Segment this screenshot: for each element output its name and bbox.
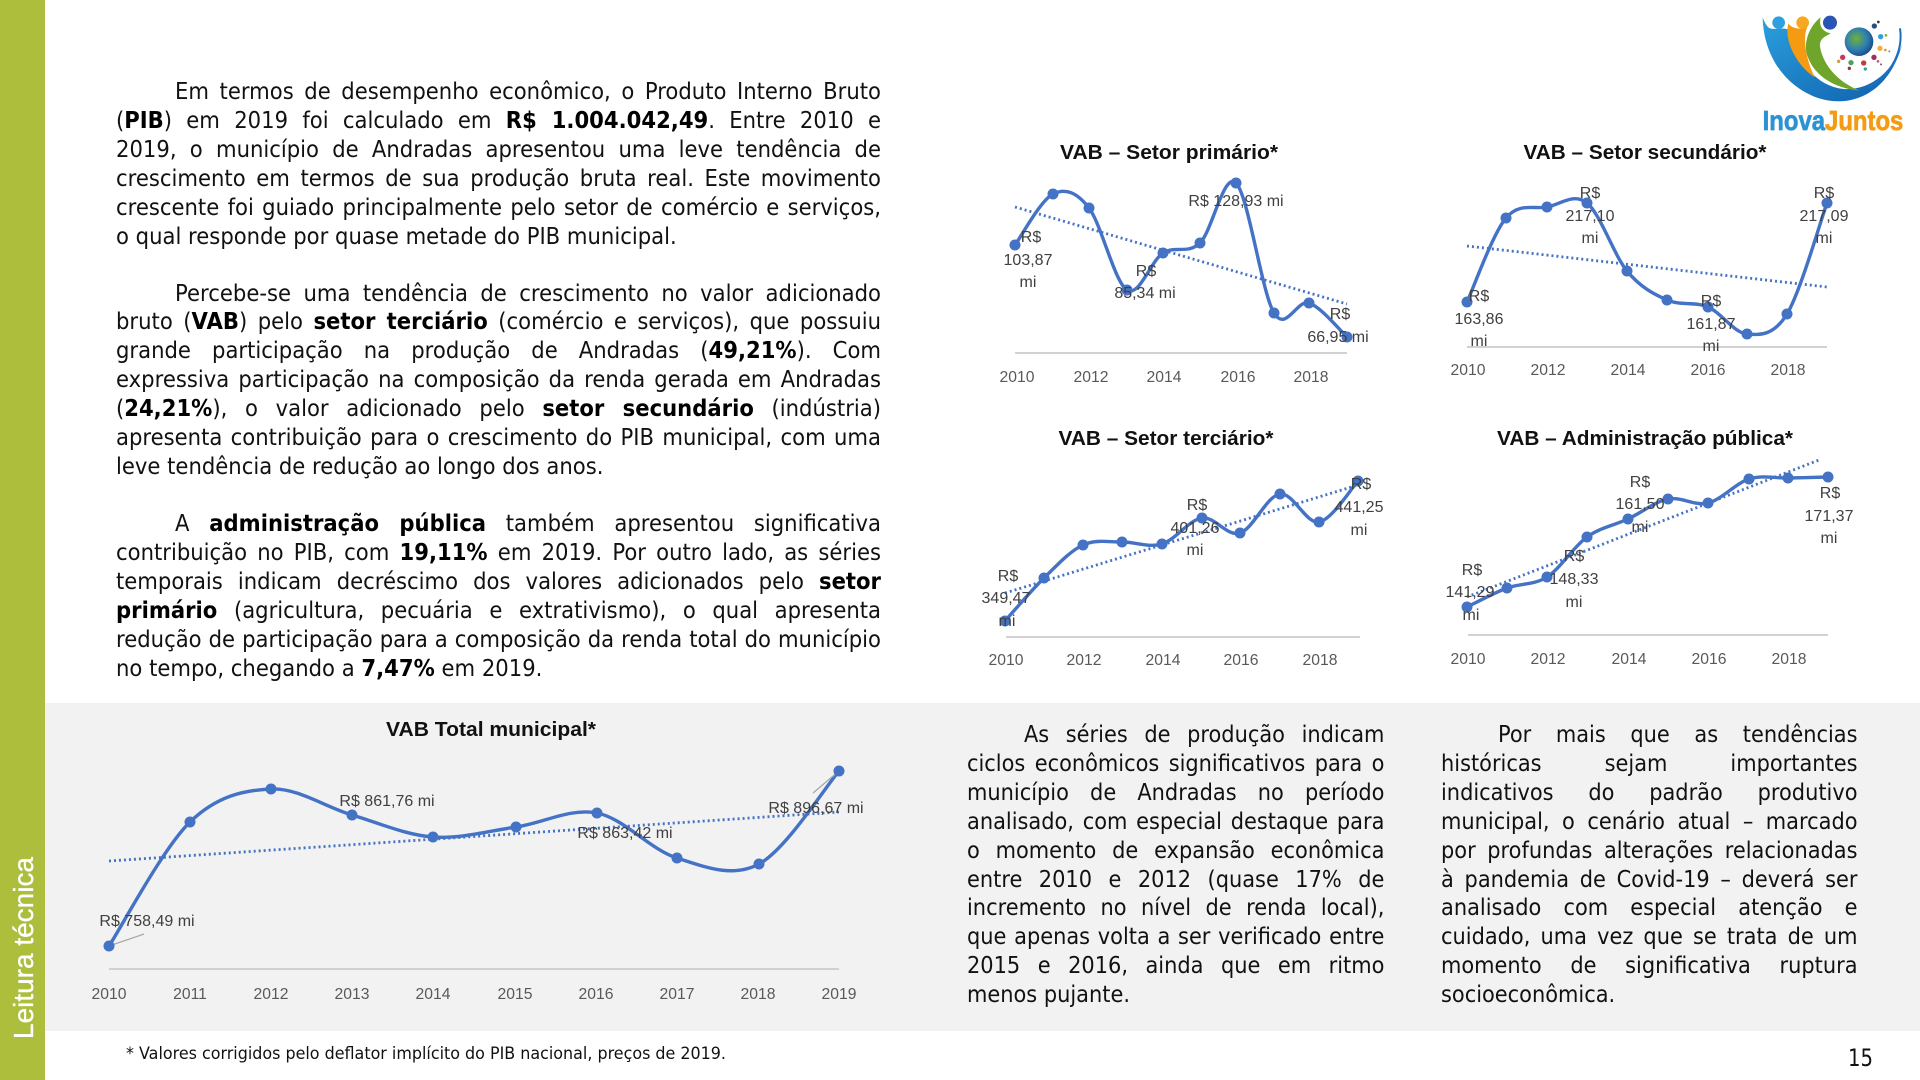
chart: VAB Total municipal: 2011 xyxy=(173,986,207,1003)
chart: VAB Setor terciário: mi xyxy=(1187,542,1203,559)
text block: tendências históricas: por profundas alterações relacionadas xyxy=(1440,836,1857,864)
chart: VAB Setor terciário: 2016 xyxy=(1224,652,1259,669)
paragraph: administração pública: A administração pública também apresentou significativa xyxy=(175,509,881,537)
chart: VAB Setor primário: R$ 128,93 mi xyxy=(1188,193,1284,210)
text block: tendências históricas: municipal, o cenário atual – marcado xyxy=(1440,807,1857,835)
chart: VAB Total municipal: R$ 896,67 mi xyxy=(768,800,864,817)
chart: VAB Administração pública: 171,37 xyxy=(1805,508,1854,525)
paragraph: PIB: crescimento em termos de sua produção bruta real. Este movimento xyxy=(116,164,881,192)
chart: VAB Setor secundário: R$ xyxy=(1701,293,1721,310)
paragraph: PIB: (PIB) em 2019 foi calculado em R$ 1.004.042,49. Entre 2010 e xyxy=(116,106,881,134)
chart: VAB Total municipal: 2010 xyxy=(92,986,127,1003)
paragraph: administração pública xyxy=(116,509,881,682)
chart: VAB Setor primário xyxy=(1000,142,1369,386)
chart: VAB Setor secundário: 161,87 xyxy=(1687,316,1736,333)
chart: VAB Total municipal: 2013 xyxy=(335,986,370,1003)
paragraph: administração pública: primário (agricultura, pecuária e extrativismo), o qual apresenta xyxy=(116,596,881,624)
chart: VAB Setor secundário: R$ xyxy=(1469,288,1489,305)
chart: VAB Setor primário: R$ xyxy=(1136,263,1156,280)
chart: VAB Setor primário: 2010 xyxy=(1000,369,1035,386)
chart: VAB Setor primário: 2014 xyxy=(1147,369,1182,386)
chart: VAB Administração pública: mi xyxy=(1566,594,1582,611)
chart: VAB Setor primário: R$ xyxy=(1330,306,1350,323)
paragraph: VAB: (24,21%), o valor adicionado pelo setor secundário (indústria) xyxy=(116,394,881,422)
chart: VAB Setor terciário: 2010 xyxy=(989,652,1024,669)
chart: VAB Setor secundário: mi xyxy=(1816,230,1832,247)
chart: VAB Setor secundário: R$ xyxy=(1580,185,1600,202)
text block: séries de produção: analisado, com especial destaque para xyxy=(967,807,1384,835)
chart: VAB Administração pública: 2010 xyxy=(1451,651,1486,668)
chart: VAB Administração pública xyxy=(1446,428,1854,668)
paragraph: administração pública: no tempo, chegando a 7,47% em 2019. xyxy=(116,654,542,682)
chart: VAB Setor secundário: 2018 xyxy=(1771,362,1806,379)
text block: tendências históricas: cuidado, uma vez que se trata de um xyxy=(1440,922,1857,950)
chart: VAB Administração pública: R$ xyxy=(1564,548,1584,565)
paragraph: VAB: leve tendência de redução ao longo dos anos. xyxy=(116,452,603,480)
paragraph: VAB: apresenta contribuição para o crescimento do PIB municipal, com uma xyxy=(116,423,881,451)
chart: VAB Setor terciário: R$ xyxy=(1351,476,1371,493)
chart: VAB Setor terciário: 2012 xyxy=(1067,652,1101,669)
chart: VAB Setor secundário: 163,86 xyxy=(1455,311,1504,328)
paragraph: VAB: bruto (VAB) pelo setor terciário (comércio e serviços), que possuiu xyxy=(116,307,881,335)
paragraph: PIB: 2019, o município de Andradas apresentou uma leve tendência de xyxy=(116,135,881,163)
chart: VAB Setor terciário: mi xyxy=(999,613,1015,630)
text block: séries de produção: incremento no nível de renda local), xyxy=(967,893,1384,921)
chart: VAB Setor secundário: 2016 xyxy=(1691,362,1726,379)
text block: séries de produção: As séries de produção indicam xyxy=(1024,720,1384,748)
paragraph: PIB: crescente foi guiado principalmente pelo setor de comércio e serviços, xyxy=(116,193,881,221)
footnote: * Valores corrigidos pelo deflator implícito do PIB nacional, preços de 2019. xyxy=(126,1044,726,1064)
chart: VAB Administração pública: mi xyxy=(1463,607,1479,624)
text block: tendências históricas: analisado com especial atenção e xyxy=(1440,893,1857,921)
chart: VAB Administração pública: R$ xyxy=(1820,485,1840,502)
chart: VAB Administração pública: 2018 xyxy=(1772,651,1807,668)
text block: tendências históricas: Por mais que as tendências xyxy=(1497,720,1857,748)
chart: VAB Setor primário: 85,34 mi xyxy=(1114,285,1176,302)
chart: VAB Administração pública: 2016 xyxy=(1692,651,1727,668)
chart: VAB Total municipal: 2017 xyxy=(660,986,694,1003)
chart: VAB Setor primário: 2018 xyxy=(1294,369,1329,386)
chart: VAB Setor secundário xyxy=(1451,142,1849,379)
text block: séries de produção: menos pujante. xyxy=(967,980,1130,1008)
chart: VAB Setor secundário: VAB – Setor secundário* xyxy=(1524,142,1767,164)
chart: VAB Administração pública: 2012 xyxy=(1531,651,1565,668)
text block: séries de produção xyxy=(967,720,1384,1008)
chart: VAB Setor terciário: 349,47 xyxy=(982,590,1031,607)
chart: VAB Total municipal: R$ 863,42 mi xyxy=(577,825,673,842)
chart: VAB Setor primário: VAB – Setor primário* xyxy=(1060,142,1278,164)
paragraph: administração pública: redução de participação para a composição da renda total do município xyxy=(116,625,881,653)
text block: séries de produção: entre 2010 e 2012 (quase 17% de xyxy=(967,865,1384,893)
paragraph: administração pública: temporais indicam decréscimo dos valores adicionados pelo setor xyxy=(116,567,881,595)
chart: VAB Setor terciário: R$ xyxy=(1187,497,1207,514)
chart: VAB Total municipal: 2018 xyxy=(741,986,776,1003)
chart: VAB Setor primário: 2012 xyxy=(1074,369,1108,386)
chart: VAB Setor primário: 66,95 mi xyxy=(1307,329,1369,346)
chart: VAB Setor secundário: 2012 xyxy=(1531,362,1565,379)
chart: VAB Total municipal: VAB Total municipal* xyxy=(386,719,596,741)
text block: tendências históricas: momento de significativa ruptura xyxy=(1440,951,1857,979)
chart: VAB Total municipal xyxy=(92,719,864,1003)
chart: VAB Setor secundário: 217,09 xyxy=(1800,208,1849,225)
chart: VAB Setor secundário: 217,10 xyxy=(1566,208,1615,225)
panel: gray lower band xyxy=(45,703,1920,1031)
chart: VAB Administração pública: 141,29 xyxy=(1446,584,1495,601)
chart: VAB Setor secundário: 2014 xyxy=(1611,362,1646,379)
chart: VAB Setor terciário: R$ xyxy=(998,568,1018,585)
chart: VAB Administração pública: 148,33 xyxy=(1550,571,1599,588)
chart: VAB Setor secundário: R$ xyxy=(1814,185,1834,202)
logo: InovaJuntos xyxy=(1762,16,1903,136)
paragraph: PIB: Em termos de desempenho econômico, o Produto Interno Bruto xyxy=(175,77,881,105)
paragraph: PIB xyxy=(116,77,881,250)
text block: tendências históricas: históricas sejam importantes xyxy=(1440,749,1857,777)
chart: VAB Setor secundário: mi xyxy=(1582,230,1598,247)
text block: séries de produção: o momento de expansão econômica xyxy=(967,836,1384,864)
chart: VAB Total municipal: 2015 xyxy=(498,986,533,1003)
page number: 15 xyxy=(1848,1044,1873,1072)
chart: VAB Total municipal: R$ 758,49 mi xyxy=(99,913,195,930)
chart: VAB Setor secundário: mi xyxy=(1471,333,1487,350)
text block: tendências históricas: socioeconômica. xyxy=(1440,980,1615,1008)
text block: tendências históricas: à pandemia de Covid-19 – deverá ser xyxy=(1440,865,1857,893)
paragraph: VAB: Percebe-se uma tendência de crescimento no valor adicionado xyxy=(175,278,881,306)
text block: tendências históricas xyxy=(1440,720,1858,1008)
chart: VAB Total municipal: 2019 xyxy=(822,986,856,1003)
chart: VAB Setor primário: R$ xyxy=(1021,229,1041,246)
text block: séries de produção: município de Andradas no período xyxy=(967,778,1384,806)
sidebar: Leitura técnica: Leitura técnica xyxy=(8,857,39,1039)
text block: tendências históricas: indicativos do padrão produtivo xyxy=(1440,778,1857,806)
chart: VAB Administração pública: 161,50 xyxy=(1616,496,1665,513)
chart: VAB Administração pública: mi xyxy=(1632,519,1648,536)
text block: séries de produção: 2015 e 2016, ainda que em ritmo xyxy=(967,951,1384,979)
chart: VAB Setor terciário: mi xyxy=(1351,522,1367,539)
chart: VAB Administração pública: 2014 xyxy=(1612,651,1647,668)
chart: VAB Setor terciário: 441,25 xyxy=(1335,499,1384,516)
sidebar: Leitura técnica xyxy=(0,0,45,1080)
chart: VAB Setor terciário: VAB – Setor terciário* xyxy=(1058,428,1274,450)
chart: VAB Administração pública: R$ xyxy=(1462,562,1482,579)
chart: VAB Administração pública: mi xyxy=(1821,530,1837,547)
chart: VAB Setor primário: 103,87 xyxy=(1004,252,1053,269)
chart: VAB Total municipal: 2016 xyxy=(579,986,614,1003)
chart: VAB Total municipal: R$ 861,76 mi xyxy=(339,793,435,810)
chart: VAB Setor terciário: 2018 xyxy=(1303,652,1338,669)
chart: VAB Total municipal: 2012 xyxy=(254,986,288,1003)
chart: VAB Setor terciário: 401,26 xyxy=(1171,520,1220,537)
paragraph: VAB: expressiva participação na composição da renda gerada em Andradas xyxy=(116,365,881,393)
chart: VAB Setor terciário: 2014 xyxy=(1146,652,1181,669)
chart: VAB Setor secundário: 2010 xyxy=(1451,362,1486,379)
chart: VAB Setor primário: mi xyxy=(1020,274,1036,291)
paragraph: PIB: o qual responde por quase metade do PIB municipal. xyxy=(116,222,677,250)
paragraph: VAB xyxy=(116,278,881,480)
chart: VAB Administração pública: VAB – Administração pública* xyxy=(1497,428,1793,450)
text block: main paragraphs xyxy=(116,77,881,682)
text block: séries de produção: que apenas volta a ser verificado entre xyxy=(967,922,1384,950)
logo: InovaJuntos: InovaJuntos xyxy=(1763,105,1903,136)
chart: VAB Setor secundário: mi xyxy=(1703,338,1719,355)
paragraph: VAB: grande participação na produção de Andradas (49,21%). Com xyxy=(116,336,881,364)
text block: séries de produção: ciclos econômicos significativos para o xyxy=(967,749,1384,777)
chart: VAB Setor terciário xyxy=(982,428,1384,669)
chart: VAB Administração pública: R$ xyxy=(1630,474,1650,491)
chart: VAB Setor primário: 2016 xyxy=(1221,369,1256,386)
paragraph: administração pública: contribuição no PIB, com 19,11% em 2019. Por outro lado, as séries xyxy=(116,538,881,566)
chart: VAB Total municipal: 2014 xyxy=(416,986,451,1003)
